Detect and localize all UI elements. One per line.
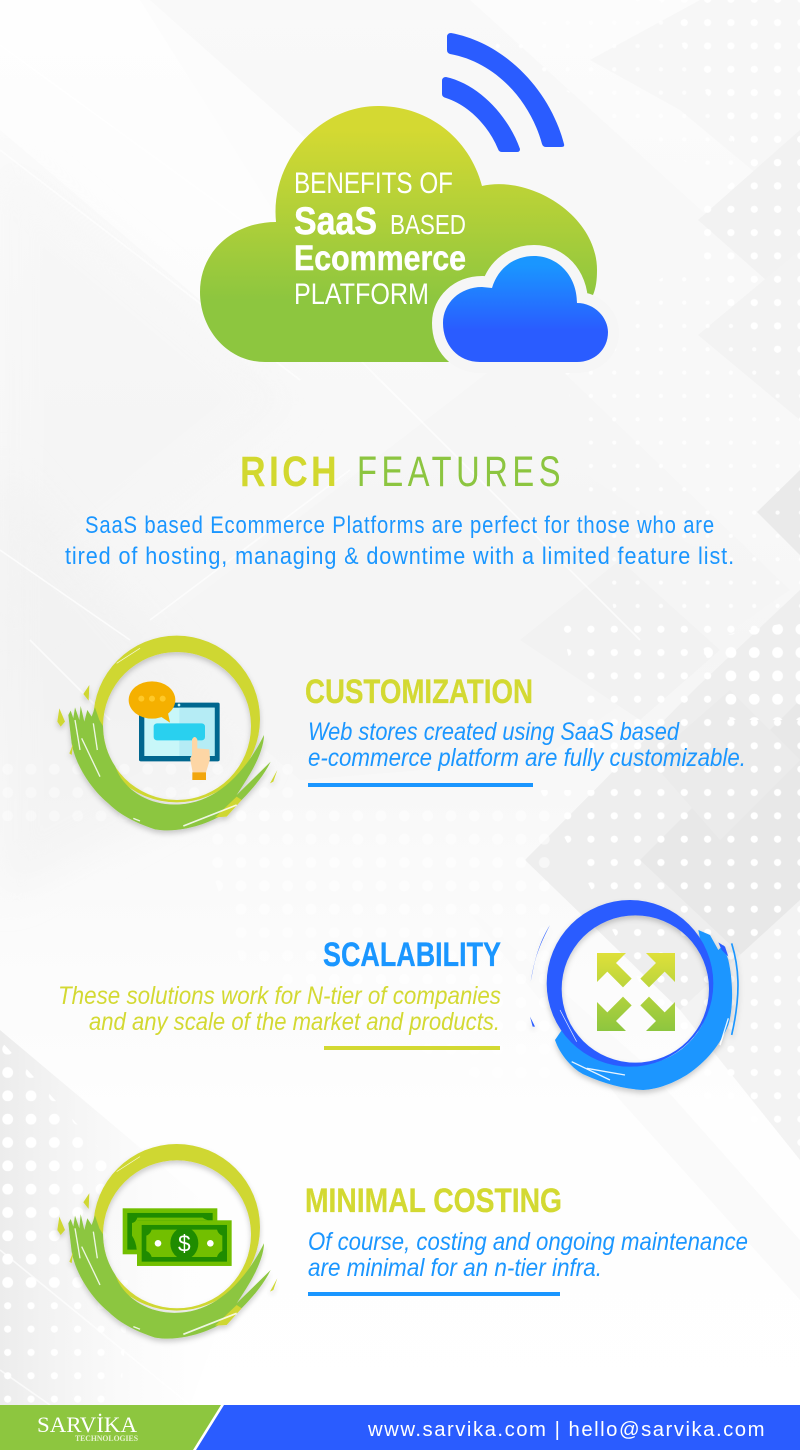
footer bar bbox=[0, 1405, 800, 1450]
icon: expand arrows bbox=[597, 953, 675, 1031]
icon: scalability ring bbox=[530, 900, 738, 1090]
feature text: customization: e-commerce platform are fully customizable. bbox=[308, 744, 746, 772]
feature text: minimal costing: MINIMAL COSTING bbox=[305, 1182, 562, 1220]
title text: BASED bbox=[390, 209, 466, 240]
feature text: minimal costing: Of course, costing and ongoing maintenance bbox=[308, 1228, 748, 1256]
icon: minimal costing ring bbox=[57, 1144, 277, 1339]
title text: Ecommerce bbox=[294, 239, 466, 278]
logo: sarvika technologies: TECHNOLOGIES bbox=[75, 1434, 139, 1443]
heading: rich features: FEATURES bbox=[357, 448, 565, 496]
heading: rich features bbox=[240, 448, 565, 496]
title text: PLATFORM bbox=[294, 278, 429, 311]
feature text: scalability bbox=[58, 936, 501, 1050]
icon: green cloud bbox=[200, 106, 597, 362]
intro text bbox=[65, 512, 735, 570]
title text: BENEFITS OF bbox=[294, 167, 453, 200]
title text bbox=[294, 167, 466, 311]
intro text: tired of hosting, managing & downtime with a limited feature list. bbox=[65, 543, 735, 570]
feature text: customization: CUSTOMIZATION bbox=[305, 673, 533, 711]
icon: banknotes: $ bbox=[178, 1231, 191, 1257]
heading: rich features: RICH bbox=[240, 448, 340, 496]
icon: banknotes bbox=[123, 1208, 232, 1266]
icon: customization ring bbox=[57, 636, 277, 830]
logo: sarvika technologies: SARVİKA bbox=[37, 1412, 137, 1437]
feature text: scalability: These solutions work for N-tier of companies bbox=[58, 982, 501, 1010]
feature text: scalability: SCALABILITY bbox=[323, 936, 501, 974]
contact text: www.sarvika.com | hello@sarvika.com bbox=[367, 1419, 766, 1441]
feature text: customization: Web stores created using SaaS based bbox=[308, 718, 680, 746]
hero: cloud logo with title bbox=[200, 33, 608, 362]
title text: SaaS bbox=[294, 200, 377, 243]
feature text: customization bbox=[305, 673, 746, 787]
icon: wifi arcs bbox=[442, 33, 564, 152]
feature text: scalability: and any scale of the market and products. bbox=[89, 1008, 500, 1036]
icon: blue cloud bbox=[443, 256, 608, 362]
feature text: minimal costing bbox=[305, 1182, 748, 1296]
feature text: minimal costing: are minimal for an n-tier infra. bbox=[308, 1254, 602, 1282]
icon: tablet with speech bubble bbox=[129, 681, 220, 780]
